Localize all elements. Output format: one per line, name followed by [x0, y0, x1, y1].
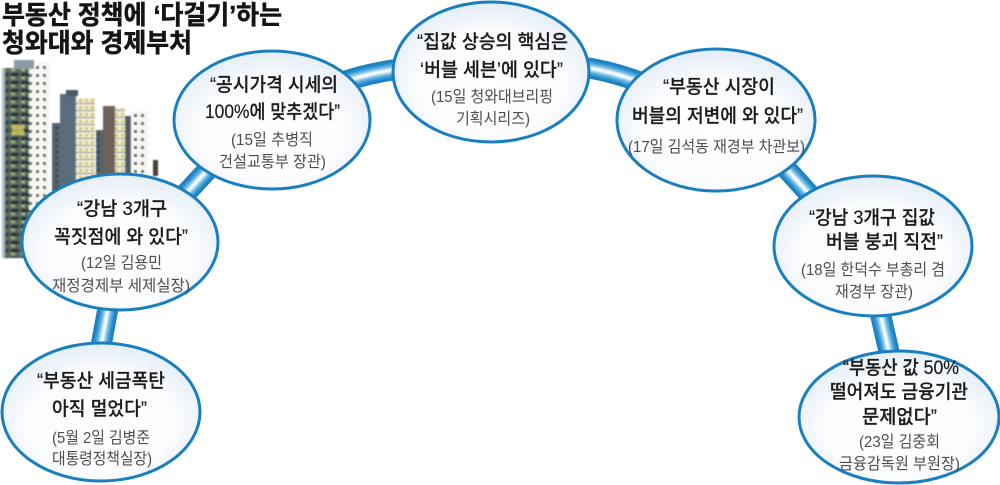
connector: bubble 4 to 5 — [582, 67, 645, 84]
bubble: 15일 청와대브리핑: “집값 상승의 핵심은 — [417, 31, 568, 53]
bubble: 15일 청와대브리핑: (15일 청와대브리핑 — [431, 88, 553, 106]
bubble: 17일 김석동: 버블의 저변에 와 있다” — [632, 105, 803, 127]
bubble: 5월 2일 김병준 — [2, 343, 200, 481]
title — [2, 0, 282, 58]
bubble: 12일 김용민: 꼭짓점에 와 있다” — [54, 226, 188, 248]
bubble: 23일 김중회: 떨어져도 금융기관 — [830, 381, 968, 403]
bubble: 18일 한덕수: 재경부 장관) — [835, 283, 913, 301]
bubble: 15일 추병직: (15일 추병직 — [231, 131, 313, 149]
bubble: 17일 김석동: “부동산 시장이 — [663, 76, 775, 98]
bubble: 18일 한덕수: “강남 3개구 집값 — [809, 207, 935, 229]
bubble: 15일 청와대브리핑: 기획시리즈) — [456, 110, 530, 128]
connector: bubble 3 to 4 — [340, 69, 400, 83]
connector: bubble 2 to 3 — [177, 163, 214, 203]
bubble: 15일 추병직: 100%에 맞추겠다” — [205, 101, 340, 123]
bubble: 23일 김중회: (23일 김중회 — [859, 433, 940, 451]
bubble: 5월 2일 김병준: 대통령정책실장) — [52, 450, 152, 468]
bubble: 15일 추병직 — [174, 51, 370, 189]
apartment buildings photo — [2, 60, 158, 258]
bubble: 12일 김용민 — [22, 174, 218, 310]
bubble: 12일 김용민: “강남 3개구 — [77, 198, 167, 220]
bubble: 15일 청와대브리핑: ‘버블 세븐’에 있다” — [420, 59, 563, 81]
title: 부동산 정책에 ‘다걸기’하는 — [2, 0, 282, 30]
connector: bubble 6 to 7 — [879, 308, 890, 356]
connector: bubble 1 to 2 — [101, 308, 108, 346]
bubble: 17일 김석동: (17일 김석동 재경부 차관보) — [628, 138, 805, 156]
bubble: 15일 추병직: 건설교통부 장관) — [219, 153, 326, 171]
bubble: 5월 2일 김병준: (5월 2일 김병준 — [52, 429, 150, 447]
bubble: 5월 2일 김병준: 아직 멀었다” — [52, 398, 147, 420]
bubble: 18일 한덕수: 버블 붕괴 직전” — [826, 231, 943, 253]
bubble: 18일 한덕수: (18일 한덕수 부총리 겸 — [801, 261, 945, 279]
bubble: 15일 추병직: “공시가격 시세의 — [210, 74, 338, 96]
bubble: 12일 김용민: 재정경제부 세제실장) — [52, 277, 190, 295]
bubble: 23일 김중회: 금융감독원 부원장) — [839, 455, 960, 473]
bubble: 15일 청와대브리핑 — [393, 2, 589, 142]
bubble: 12일 김용민: (12일 김용민 — [81, 254, 162, 272]
connector: bubble 5 to 6 — [783, 165, 812, 197]
bubble: 23일 김중회 — [799, 351, 999, 483]
bubble: 23일 김중회: 문제없다” — [862, 406, 937, 428]
bubble: 18일 한덕수 — [774, 176, 972, 316]
bubble: 5월 2일 김병준: “부동산 세금폭탄 — [37, 370, 165, 392]
bubble: 23일 김중회: “부동산 값 50% — [843, 357, 959, 379]
bubble: 17일 김석동 — [617, 49, 815, 191]
title: 청와대와 경제부처 — [2, 28, 192, 58]
